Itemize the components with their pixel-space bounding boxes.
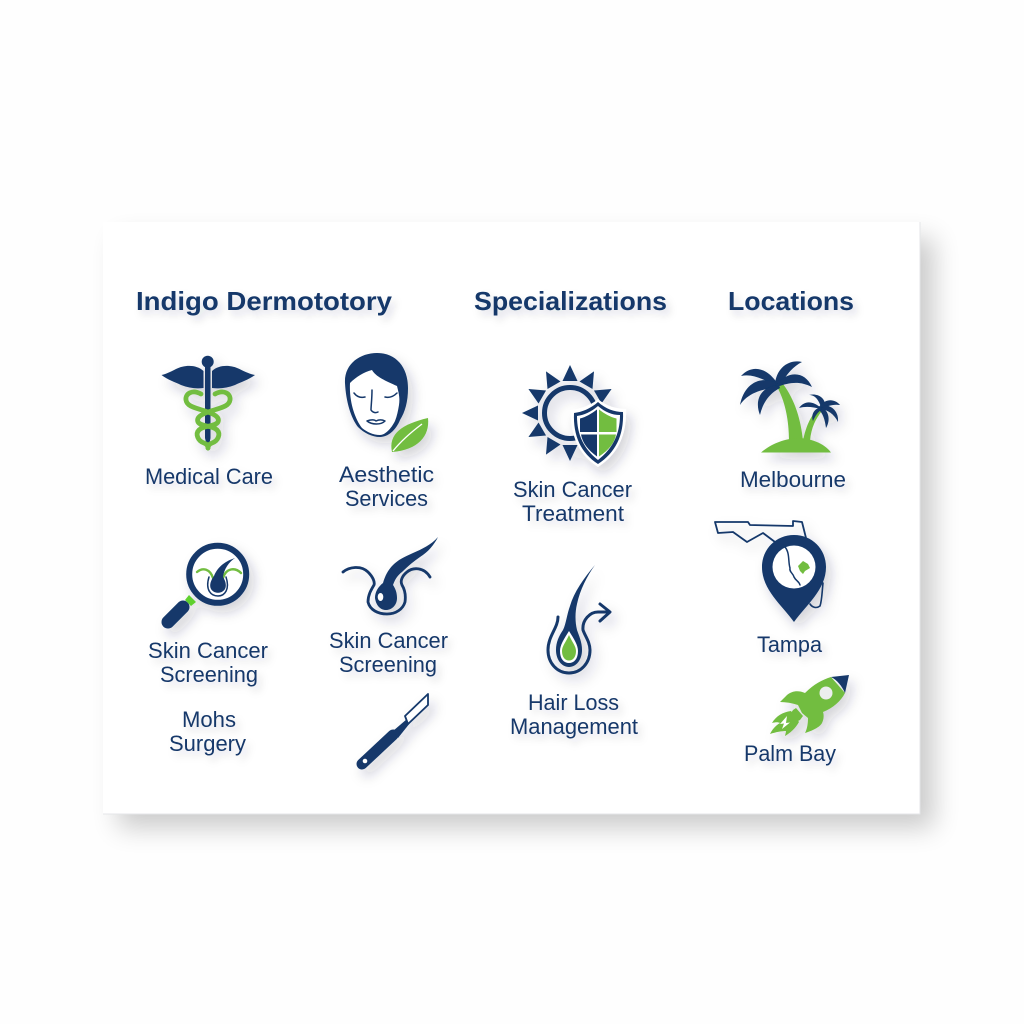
- icon: Florida map pin: [715, 521, 826, 622]
- heading: Indigo Dermototory: Indigo Dermototory: [136, 286, 393, 316]
- icon: hair growth with arrow: [548, 565, 610, 673]
- label: Mohs Surgery: [169, 707, 246, 756]
- label: Skin Cancer Screening right: Skin Cancer: [329, 628, 448, 653]
- icon: rocket: [770, 675, 849, 736]
- label: Skin Cancer Screening left: [148, 638, 268, 687]
- label: Aesthetic Services: Services: [345, 486, 428, 511]
- label: Hair Loss Management: Management: [510, 714, 638, 739]
- heading: Specializations: Specializations: [474, 286, 667, 316]
- icon: sun with shield: [522, 365, 626, 467]
- label: Aesthetic Services: Aesthetic: [339, 462, 434, 487]
- label: Melbourne: Melbourne: [740, 467, 846, 492]
- label: Medical Care: Medical Care: [145, 464, 273, 489]
- label: Skin Cancer Screening right: [329, 628, 448, 677]
- label: Aesthetic Services: [339, 462, 434, 511]
- icon: hair follicle: [343, 537, 438, 614]
- label: Mohs Surgery: Surgery: [169, 731, 246, 756]
- icon: scalpel: [362, 694, 428, 764]
- label: Tampa: Tampa: [757, 632, 823, 657]
- label: Skin Cancer Treatment: Skin Cancer: [513, 477, 632, 502]
- label: Palm Bay: Palm Bay: [744, 741, 836, 766]
- label: Mohs Surgery: Mohs: [182, 707, 236, 732]
- label: Skin Cancer Screening right: Screening: [339, 652, 437, 677]
- icon: caduceus: [162, 356, 255, 451]
- label: Skin Cancer Screening left: Skin Cancer: [148, 638, 268, 663]
- label: Skin Cancer Screening left: Screening: [160, 662, 258, 687]
- label: Hair Loss Management: Hair Loss: [528, 690, 619, 715]
- icon: face with leaf: [345, 353, 428, 452]
- label: Hair Loss Management: [510, 690, 638, 739]
- label: Skin Cancer Treatment: [513, 477, 632, 526]
- label: Skin Cancer Treatment: Treatment: [522, 501, 624, 526]
- heading: Locations: Locations: [728, 286, 854, 316]
- panel: card background: [103, 222, 934, 828]
- icon: magnifier with follicle: [168, 546, 246, 622]
- icon: palm trees: [740, 361, 840, 452]
